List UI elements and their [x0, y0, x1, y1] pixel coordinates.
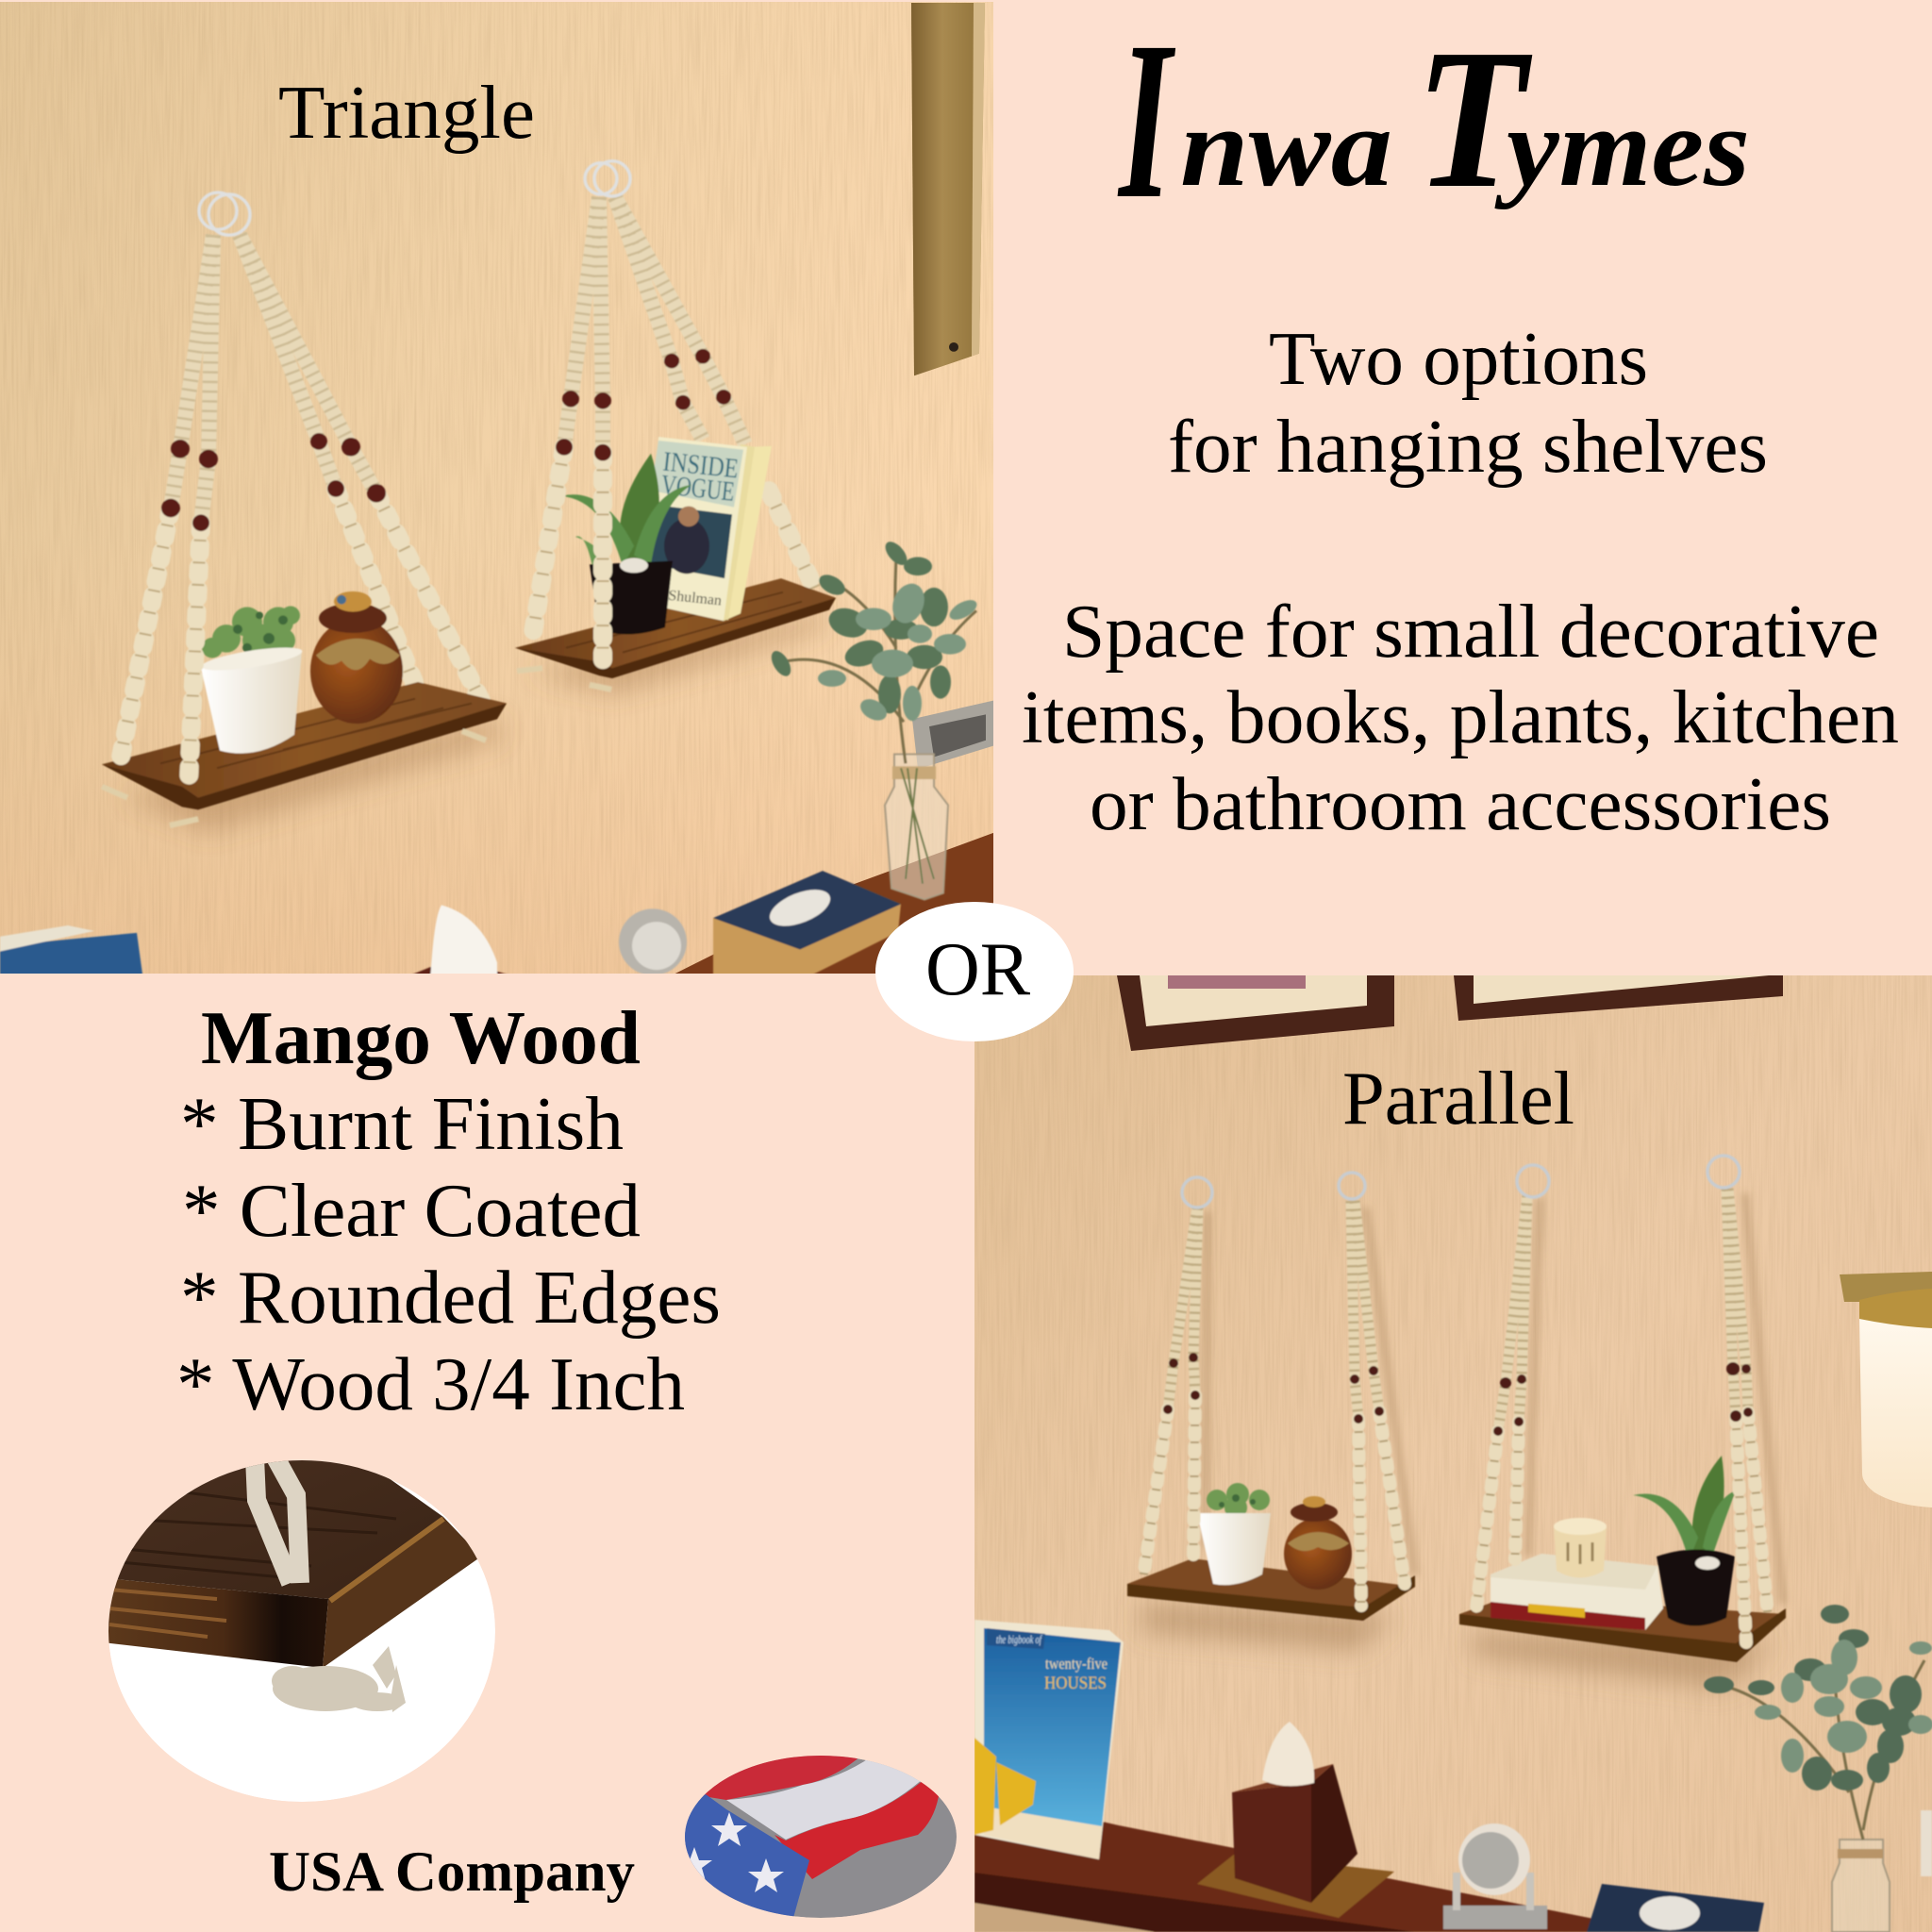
label: Triangle: Triangle: [278, 72, 535, 155]
text: Mango Wood features: [176, 997, 721, 1426]
rope knot underneath: [272, 1646, 406, 1712]
book on right shelf: INSIDE: [661, 447, 740, 484]
right triangle shelf ropes behind items: [615, 197, 816, 591]
eucalyptus leaves: [1704, 1605, 1932, 1790]
title: brand name: ymes: [1493, 84, 1750, 209]
left triangle shelf ropes in front: [121, 235, 213, 782]
feature: wood thickness: * Wood 3/4 Inch: [176, 1343, 685, 1426]
tissue box: [1197, 1722, 1394, 1918]
blue canton: [675, 1794, 809, 1924]
parallel shelf beads: [1163, 1353, 1753, 1436]
text: two options: [1168, 318, 1768, 489]
stars: [676, 1812, 784, 1892]
heading: Mango Wood: Mango Wood: [201, 997, 641, 1080]
large book leaning on wall: [974, 1620, 1124, 1859]
grain on front edge: [109, 1590, 226, 1637]
lamp: [1840, 1272, 1932, 1507]
bronze wall panel: [911, 3, 985, 375]
feature: burnt finish: * Burnt Finish: [180, 1083, 624, 1166]
title: brand name: I: [1118, 0, 1175, 245]
desk: [974, 1792, 1604, 1932]
left shelf board: [102, 682, 507, 809]
feature: rounded edges: * Rounded Edges: [180, 1257, 721, 1340]
left triangle shelf ropes behind items: [240, 235, 481, 701]
book on right shelf: VOGUE: [659, 470, 736, 508]
large book leaning on wall: the bigbook of: [996, 1632, 1043, 1646]
text: uses of the shelves: items, books, plants, kitchen: [1022, 676, 1899, 759]
right shelf rings: [585, 161, 630, 196]
wall socket sliver: [1921, 1810, 1932, 1876]
tissue and box: [396, 905, 528, 981]
candle holder: [1554, 1518, 1607, 1577]
large book leaning on wall: twenty-five: [1045, 1655, 1108, 1673]
clock: [619, 908, 687, 975]
right triangle shelf ropes in front: [532, 197, 603, 659]
wood close-up oval: [94, 1443, 495, 1802]
black pot with snake plant: [1633, 1456, 1736, 1626]
white stripe: [726, 1757, 929, 1840]
white plant pot with succulent: [200, 607, 304, 754]
shelf front edge: [94, 1577, 328, 1668]
rope tails under right shelf: [517, 668, 611, 690]
eucalyptus vase: [1832, 1840, 1890, 1932]
orange edge highlight: [330, 1519, 443, 1601]
label: USA Company: USA Company: [269, 1840, 635, 1903]
text: uses of the shelves: or bathroom accessories: [1090, 763, 1831, 846]
text: two options: Two options: [1269, 318, 1648, 401]
text: uses of the shelves: Space for small decorative: [1062, 591, 1879, 674]
red stripe top: [679, 1745, 873, 1800]
book at bottom right: [1587, 1884, 1764, 1932]
eucalyptus branches: [1719, 1660, 1924, 1840]
left shelf beads: [161, 433, 386, 531]
shelf side edge: [323, 1517, 481, 1668]
picture frame left: [1117, 975, 1394, 1051]
text: uses of the shelves: [1022, 591, 1899, 846]
white oval base: [108, 1460, 495, 1802]
black pot with snake plant: [561, 454, 691, 635]
book at bottom left: [0, 925, 143, 981]
socket plate: [912, 701, 993, 769]
white pot and succulent: [1197, 1483, 1271, 1585]
parallel rope shadows: [1206, 1193, 1783, 1604]
glazed brown jar: [310, 591, 403, 724]
panel: triangle shelves photo: [0, 2, 993, 981]
desk clock: [1443, 1824, 1547, 1929]
OR badge: OR: [925, 928, 1031, 1011]
book stack on shelf: [1491, 1554, 1663, 1630]
text: two options: for hanging shelves: [1168, 406, 1768, 489]
parallel shelf ropes: [1143, 1189, 1768, 1642]
book on right shelf: [641, 437, 772, 621]
panel: parallel shelves photo: [974, 975, 1932, 1932]
title: brand name: [1118, 0, 1750, 245]
parallel shelf rings: [1182, 1156, 1740, 1208]
title: brand name: nwa: [1180, 84, 1392, 209]
left shelf rings: [199, 192, 250, 235]
feature: clear coated: * Clear Coated: [182, 1170, 641, 1253]
large book leaning on wall: HOUSES: [1044, 1674, 1107, 1693]
corner wall under desk: [974, 1887, 1163, 1932]
wood grain: [104, 1491, 396, 1577]
wall: [974, 975, 1932, 1932]
rope through the shelf: [255, 1457, 300, 1583]
OR badge: [875, 902, 1074, 1041]
rope tails under left shelf: [102, 731, 486, 825]
USA flag oval: [675, 1745, 957, 1924]
parallel shelf shadows: [1141, 1604, 1774, 1689]
shelf top surface: [94, 1443, 443, 1599]
brown jar: [1284, 1496, 1352, 1590]
eucalyptus leaves: [768, 538, 980, 724]
book stack on desk: [713, 871, 901, 981]
book on right shelf: Shulman: [668, 588, 723, 608]
left parallel shelf board: [1127, 1558, 1415, 1621]
eucalyptus branches: [783, 556, 976, 763]
label: Parallel: Parallel: [1342, 1058, 1574, 1141]
desk: [660, 833, 993, 981]
concrete background: [685, 1756, 957, 1918]
red stripe lower: [774, 1775, 939, 1879]
eucalyptus vase: [885, 755, 948, 900]
wall: [0, 2, 993, 974]
right shelf board: [515, 578, 836, 678]
title: brand name: T: [1415, 8, 1533, 229]
right shelf beads: [556, 349, 731, 461]
picture frame right: [1454, 975, 1783, 1021]
shelf shadows: [123, 610, 830, 833]
right parallel shelf board: [1459, 1596, 1786, 1662]
